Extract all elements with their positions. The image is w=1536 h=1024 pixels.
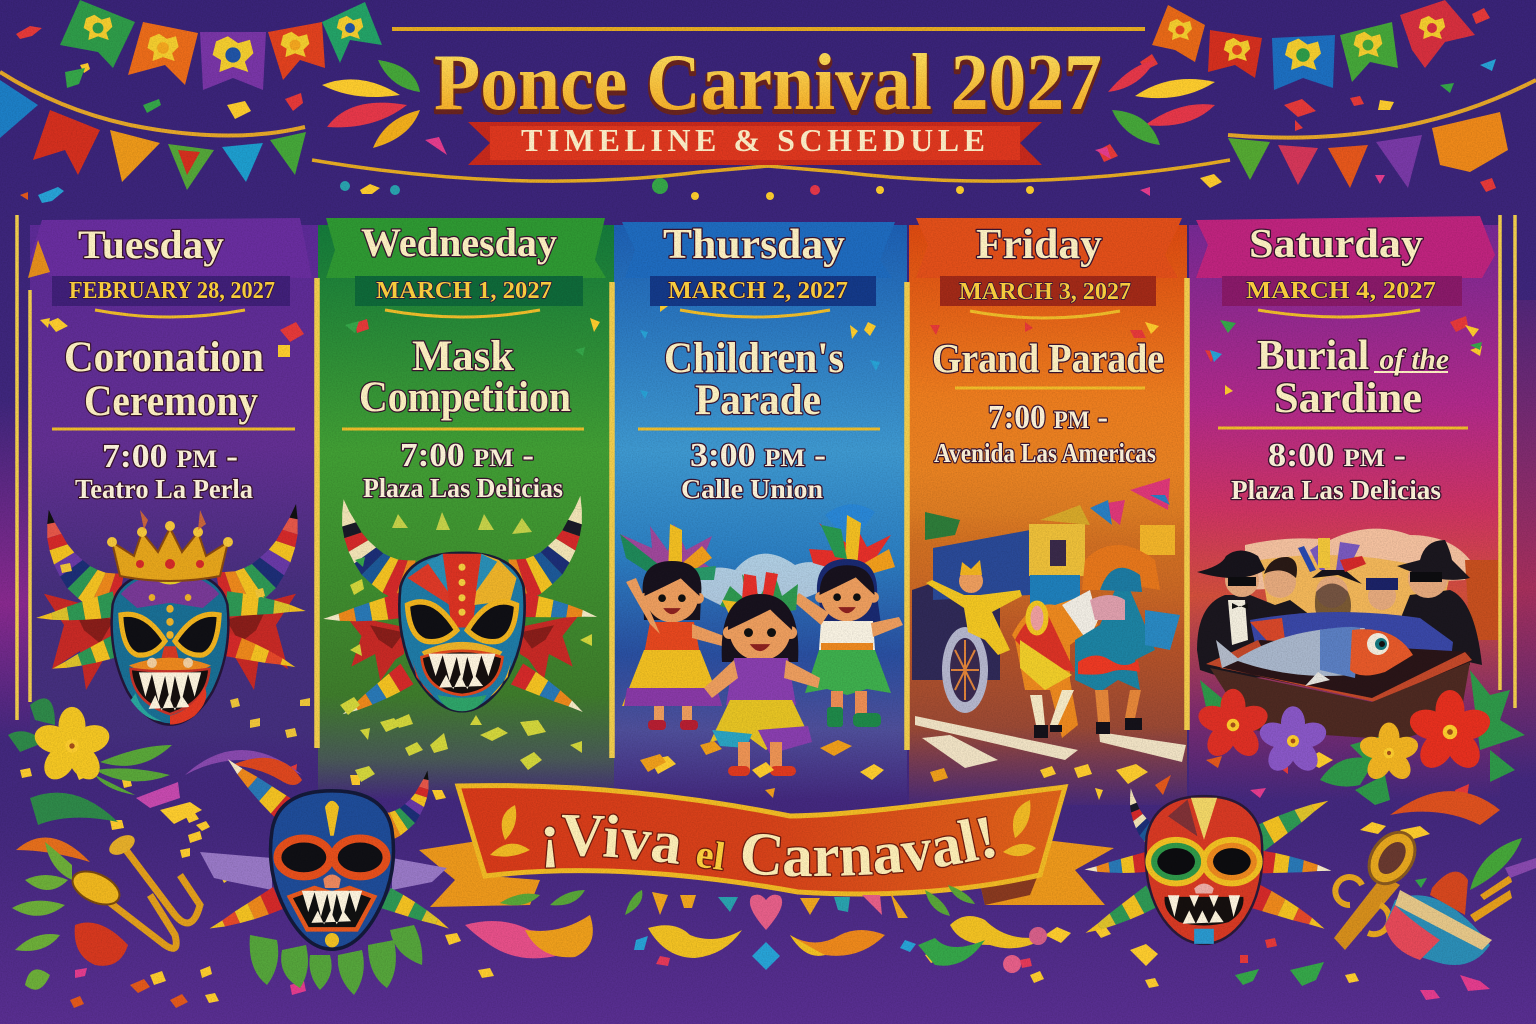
event: Grand Parade: Grand Parade bbox=[932, 335, 1164, 381]
panel: Wednesday Mask Competition bbox=[318, 225, 614, 805]
event: Mask Competition: Competition bbox=[359, 374, 571, 421]
time and place: 8:00 PM - bbox=[1268, 437, 1406, 474]
icon: bottom left mask bbox=[200, 749, 454, 995]
ribbon: Saturday: Saturday bbox=[1249, 220, 1424, 266]
column: Saturday bbox=[1196, 216, 1495, 505]
icon: bottom left trumpet and leaves bbox=[12, 831, 200, 990]
bunting: top right bbox=[1152, 0, 1508, 188]
ribbon: Saturday bbox=[1196, 216, 1495, 278]
time and place: Plaza Las Delicias bbox=[1231, 475, 1441, 505]
illustration: parade float with horses bbox=[912, 505, 1180, 738]
title swags bbox=[312, 160, 1230, 181]
panel: Thursday Children's Parade bbox=[614, 225, 907, 805]
column: Friday bbox=[916, 218, 1182, 468]
ribbon: Wednesday bbox=[326, 218, 606, 278]
ribbon: Wednesday: Wednesday bbox=[361, 220, 557, 265]
event: Children's Parade: Parade bbox=[695, 377, 821, 424]
time and place: Avenida Las Americas bbox=[934, 438, 1156, 468]
column: Tuesday bbox=[28, 218, 312, 504]
date: March 4, 2027: MARCH 4, 2027 bbox=[1246, 278, 1436, 304]
event: Children's Parade bbox=[664, 335, 844, 424]
time and place bbox=[934, 399, 1156, 468]
event: Mask Competition: Mask bbox=[412, 333, 514, 380]
time and place: Plaza Las Delicias bbox=[363, 473, 563, 503]
event: Coronation Ceremony: Coronation bbox=[64, 334, 264, 381]
banner: Viva el Carnaval: ¡Viva el Carnaval! bbox=[544, 813, 996, 878]
date: March 3, 2027: MARCH 3, 2027 bbox=[959, 279, 1131, 305]
icon: bottom right mask bbox=[1080, 788, 1335, 944]
icon: vejigante mask green bbox=[321, 496, 599, 725]
event: Mask Competition bbox=[359, 333, 571, 421]
event: Burial of the Sardine: Sardine bbox=[1274, 375, 1422, 422]
event: Coronation Ceremony bbox=[64, 334, 264, 425]
ribbon: Thursday: Thursday bbox=[663, 222, 845, 268]
date: March 1, 2027 bbox=[355, 276, 583, 306]
event: Burial of the Sardine bbox=[1257, 333, 1449, 422]
subtitle ribbon bbox=[468, 122, 1042, 165]
ribbon: Thursday bbox=[622, 222, 895, 278]
date: March 2, 2027 bbox=[650, 276, 876, 306]
ribbon: Friday bbox=[916, 218, 1182, 278]
icon: bottom right trumpet and maracas bbox=[1334, 824, 1536, 965]
time and place bbox=[363, 437, 563, 503]
bunting strings bbox=[0, 72, 1536, 138]
time and place: 7:00 PM - bbox=[102, 438, 238, 475]
title: Ponce Carnival 2027 bbox=[434, 42, 1102, 130]
date: March 4, 2027 bbox=[1222, 276, 1462, 306]
icon: crowned vejigante mask bbox=[34, 504, 307, 725]
flowers: lower left bbox=[8, 698, 172, 795]
date: February 28, 2027: FEBRUARY 28, 2027 bbox=[69, 278, 275, 304]
gold panel dividers bbox=[17, 215, 1515, 758]
time and place: Calle Union bbox=[681, 474, 823, 504]
panel: Tuesday Coronation Ceremony bbox=[30, 225, 318, 790]
time and place bbox=[681, 437, 826, 504]
date: March 3, 2027 bbox=[940, 276, 1156, 306]
streamers: left middle bbox=[16, 750, 1500, 862]
dots: under title bbox=[340, 178, 1034, 200]
icon: title leaf sprays bbox=[322, 60, 1215, 148]
bunting: top left bbox=[0, 0, 382, 190]
crosswalk bbox=[915, 716, 1186, 768]
event: Children's Parade: Children's bbox=[664, 335, 844, 382]
flowers: lower right bbox=[1195, 670, 1525, 805]
date: March 2, 2027: MARCH 2, 2027 bbox=[668, 278, 848, 304]
panel: Saturday Burial of the Sardine bbox=[1189, 225, 1500, 805]
side tints bbox=[0, 300, 1536, 780]
time and place: 7:00 PM - bbox=[400, 437, 534, 474]
ribbon: Tuesday: Tuesday bbox=[78, 222, 224, 267]
column: Wednesday bbox=[326, 218, 606, 503]
ribbon: Friday: Friday bbox=[976, 222, 1102, 268]
illustration: mourners and sardine coffin bbox=[1197, 538, 1482, 740]
date: March 1, 2027: MARCH 1, 2027 bbox=[376, 278, 552, 304]
time and place bbox=[1231, 437, 1441, 505]
illustration: three dancing children bbox=[620, 515, 903, 776]
swirls and streamers: bottom bbox=[465, 915, 1050, 966]
time and place: 7:00 PM - bbox=[988, 399, 1108, 436]
title: Ponce Carnival 2027 bbox=[434, 39, 1102, 127]
time and place: 3:00 PM - bbox=[690, 437, 826, 474]
subtitle ribbon: TIMELINE & SCHEDULE bbox=[521, 122, 985, 158]
banner: Viva el Carnaval bbox=[419, 783, 1114, 907]
event: Coronation Ceremony: Ceremony bbox=[84, 378, 258, 425]
ribbon: Tuesday bbox=[28, 218, 312, 278]
column: Thursday bbox=[622, 222, 895, 504]
garland: under banner bbox=[500, 885, 1032, 973]
panel: Friday Grand Parade bbox=[909, 225, 1187, 805]
time and place: Teatro La Perla bbox=[75, 474, 253, 504]
event: Burial of the Sardine: Burial of the bbox=[1257, 333, 1449, 379]
time and place bbox=[75, 438, 253, 504]
